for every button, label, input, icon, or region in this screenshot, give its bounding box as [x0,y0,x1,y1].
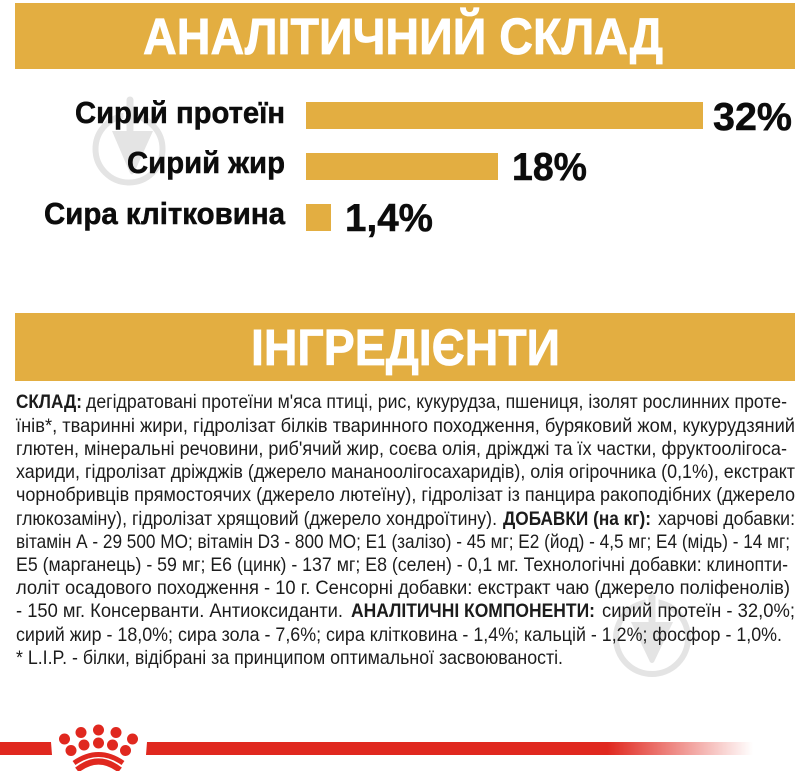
text block: ingredients list: СКЛАД: [16,391,82,413]
text block: ingredients list: ДОБАВКИ (на кг): [503,508,651,530]
text block: ingredients list [15,391,795,669]
row: crude fat: Сирий жир [127,145,285,180]
footer red stripe [0,742,753,755]
icon: watermark top left [96,95,162,182]
logo: crown [59,724,138,770]
text block: ingredients list: АНАЛІТИЧНІ КОМПОНЕНТИ: [351,600,595,622]
header band: analytical composition [15,3,795,69]
row: crude fat: 18% [512,146,587,189]
row: crude protein [75,95,792,139]
text block: ingredients list: глюкозаміну), гідролізат хрящовий (джерело хондроїтину). [16,508,497,530]
row: crude protein: Сирий протеїн [75,95,285,130]
bar chart: analytical values [44,95,792,240]
row: crude fibre: 1,4% [345,197,433,240]
header band: analytical composition: АНАЛІТИЧНИЙ СКЛАД [143,7,663,65]
row: crude protein: 32% [713,96,792,139]
row: crude fibre: Сира клітковина [44,196,286,231]
icon: watermark bottom right [616,592,688,674]
header band: ingredients: ІНГРЕДІЄНТИ [251,319,560,376]
text block: ingredients list: - 150 мг. Консерванти. Антиоксиданти. [16,600,343,622]
text block: ingredients list: * L.I.P. - білки, відібрані за принципом оптимальної засвоюваності. [16,647,563,669]
header band: ingredients [15,313,795,381]
row: crude fibre [44,196,433,240]
row: crude fat [127,145,587,189]
